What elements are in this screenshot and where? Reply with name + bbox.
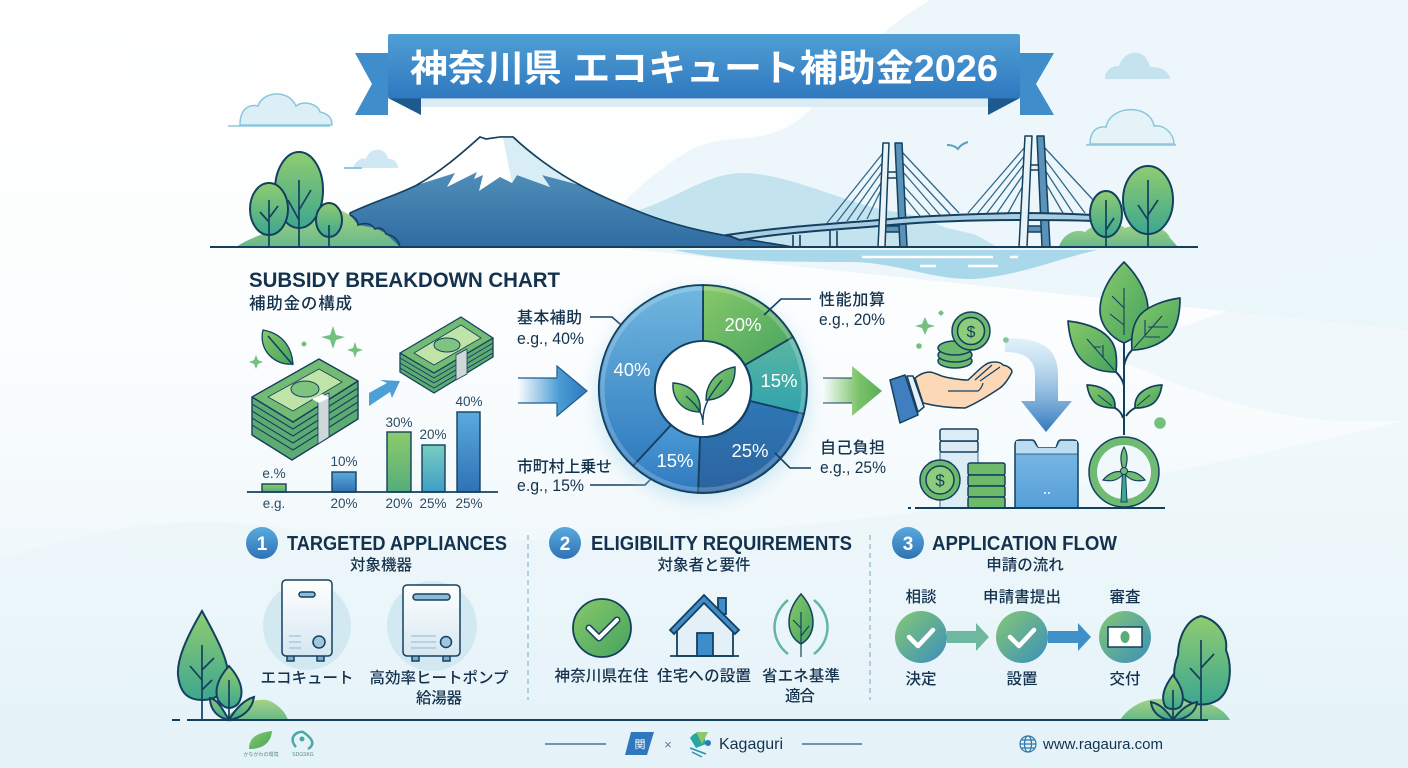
label: 市町村上乗せ: e.g., 15% bbox=[517, 477, 584, 495]
icon: leaf energy bbox=[774, 594, 828, 657]
label: 基本補助: 基本補助 bbox=[517, 309, 582, 327]
step: check 2 bbox=[996, 611, 1048, 663]
label: 自己負担: e.g., 25% bbox=[820, 459, 886, 477]
heading 1: TARGETED APPLIANCES bbox=[287, 533, 507, 555]
step: check 1 bbox=[895, 611, 947, 663]
badge 3: 3 bbox=[903, 534, 913, 555]
coin bbox=[920, 460, 960, 500]
section 3: application flow bbox=[892, 527, 1151, 688]
appliance labels: 高効率ヒートポンプ bbox=[370, 669, 509, 687]
flow arrows bbox=[947, 623, 1091, 651]
green stack bbox=[968, 463, 1005, 508]
badge 3 bbox=[892, 527, 924, 559]
base line under plant bbox=[908, 507, 1165, 509]
label: 基本補助 bbox=[517, 309, 634, 348]
flow bottom labels: 交付 bbox=[1109, 670, 1141, 688]
mountain bbox=[350, 137, 793, 247]
bottom left trees bbox=[178, 611, 288, 720]
logo: leaf: かながわの環境 bbox=[243, 751, 279, 758]
bar value labels bbox=[262, 394, 483, 511]
icon: hand with coins bbox=[890, 312, 1012, 423]
bar value labels: 20% bbox=[419, 427, 447, 442]
icon: large money stack bbox=[252, 359, 358, 460]
badge 2: 2 bbox=[560, 534, 570, 555]
bar value labels: e.% bbox=[262, 466, 286, 481]
label: 性能加算: e.g., 20% bbox=[819, 311, 885, 329]
section 1: targeted appliances bbox=[246, 527, 509, 707]
icon: base with cylinders, box, turbine bbox=[920, 429, 1159, 508]
top right trees bbox=[1059, 166, 1178, 247]
horizon line bbox=[210, 246, 1198, 248]
heading 3: APPLICATION FLOW bbox=[932, 533, 1117, 555]
suspension bridge bbox=[727, 136, 1095, 247]
bird bbox=[947, 142, 968, 149]
icon: eco cute unit bbox=[263, 580, 351, 670]
logo: Kagaguri bbox=[690, 732, 783, 757]
tower right legs bbox=[895, 136, 1050, 247]
background hills and water bbox=[620, 173, 1098, 279]
flow top labels: 申請書提出 bbox=[983, 588, 1061, 606]
footer line bbox=[172, 719, 1208, 721]
logo: Kagaguri: Kagaguri bbox=[719, 736, 783, 753]
badge 2 bbox=[549, 527, 581, 559]
eligibility labels bbox=[554, 667, 840, 705]
step: money bbox=[1099, 611, 1151, 663]
battery box bbox=[1015, 440, 1078, 508]
label: 基本補助: e.g., 40% bbox=[517, 330, 584, 348]
appliance labels bbox=[260, 669, 509, 707]
bars bbox=[262, 412, 480, 492]
icon: large plant bbox=[1068, 262, 1180, 435]
label: 自己負担: 自己負担 bbox=[820, 439, 885, 457]
flow bottom labels: 決定 bbox=[905, 670, 937, 688]
bridge cables bbox=[827, 147, 1095, 223]
bar value labels: e.g. bbox=[263, 496, 285, 511]
piers bbox=[793, 231, 837, 247]
donut percentages: 25% bbox=[731, 440, 769, 461]
icon: center sprout bbox=[673, 367, 735, 425]
eligibility labels: 省エネ基準 bbox=[762, 667, 840, 685]
section 2: eligibility bbox=[549, 527, 852, 705]
icon: small money stack bbox=[400, 317, 493, 393]
bar value labels: 20% bbox=[385, 496, 413, 511]
label: 自己負担 bbox=[775, 439, 886, 477]
icon: check bbox=[573, 599, 631, 657]
tower left legs bbox=[878, 136, 1032, 247]
top left trees bbox=[236, 152, 400, 247]
badge 1: 1 bbox=[257, 534, 268, 555]
bar chart bbox=[247, 394, 498, 511]
flow bottom labels bbox=[905, 670, 1141, 688]
eligibility labels: 住宅への設置 bbox=[657, 667, 751, 685]
footer website: www.ragaura.com bbox=[1042, 736, 1163, 753]
flow top labels: 審査 bbox=[1109, 588, 1141, 606]
arrow: blue to donut bbox=[518, 366, 587, 416]
donut chart bbox=[597, 285, 809, 501]
heading 1 bbox=[287, 533, 507, 574]
slice: 基本補助 40% bbox=[599, 285, 703, 466]
footer center logos bbox=[545, 732, 862, 757]
flow top labels bbox=[905, 588, 1141, 606]
flow bottom labels: 設置 bbox=[1006, 670, 1038, 688]
heading 2: ELIGIBILITY REQUIREMENTS bbox=[591, 533, 852, 555]
label: 性能加算 bbox=[764, 290, 885, 329]
title text: 神奈川県 エコキュート補助金2026 bbox=[410, 48, 998, 89]
slice: 15% teal bbox=[745, 337, 807, 414]
eligibility labels: 神奈川県在住 bbox=[554, 667, 648, 685]
heading 3 bbox=[932, 533, 1117, 574]
arrow: green to hand bbox=[823, 366, 882, 416]
chart heading: SUBSIDY BREAKDOWN CHART bbox=[249, 269, 560, 292]
bar value labels: 25% bbox=[455, 496, 483, 511]
flow top labels: 相談 bbox=[905, 588, 937, 606]
slice: 自己負担 25% bbox=[698, 401, 804, 493]
icon: heat pump unit bbox=[387, 581, 477, 671]
appliance labels: エコキュート bbox=[260, 670, 354, 687]
cylinder stack bbox=[940, 429, 978, 508]
appliance labels: 給湯器 bbox=[416, 689, 462, 707]
icon: leaf and sparkles bbox=[249, 326, 363, 369]
badge 1 bbox=[246, 527, 278, 559]
donut percentages: 15% bbox=[760, 370, 798, 391]
title banner bbox=[355, 34, 1054, 115]
bar value labels: 10% bbox=[330, 454, 358, 469]
icon: house bbox=[670, 595, 739, 656]
bar value labels: 40% bbox=[455, 394, 483, 409]
footer center logos: × bbox=[664, 737, 672, 752]
arrow: curved blue down bbox=[1005, 338, 1072, 432]
heading 1: 対象機器 bbox=[350, 555, 412, 574]
logo: blue flag bbox=[625, 732, 654, 755]
logo: blue flag: 関 bbox=[634, 738, 646, 751]
eligibility labels: 適合 bbox=[785, 687, 815, 705]
heading 2 bbox=[591, 533, 852, 574]
coin stack bbox=[938, 341, 972, 368]
tower beams bbox=[884, 165, 1043, 232]
logo: teal figure: SDGSKG bbox=[292, 752, 314, 758]
donut percentages: 40% bbox=[613, 359, 651, 380]
coin: $ bbox=[935, 471, 945, 490]
label: 性能加算: 性能加算 bbox=[819, 290, 885, 309]
bar value labels: 20% bbox=[330, 496, 358, 511]
clouds bbox=[228, 53, 1176, 168]
label: 市町村上乗せ: 市町村上乗せ bbox=[517, 458, 612, 476]
slice: 性能加算 20% bbox=[703, 285, 793, 365]
bar value labels: 30% bbox=[385, 415, 413, 430]
icon: arrow between stacks bbox=[369, 380, 400, 406]
chart heading: 補助金の構成 bbox=[249, 294, 352, 313]
dashed dividers bbox=[528, 535, 870, 700]
turbine circle bbox=[1089, 437, 1159, 507]
bar value labels: 25% bbox=[419, 496, 447, 511]
bridge deck bbox=[727, 213, 1093, 240]
sparkles near hand bbox=[915, 310, 1166, 429]
icon: hand with coins: $ bbox=[967, 324, 976, 341]
chart heading bbox=[249, 269, 560, 313]
heading 3: 申請の流れ bbox=[986, 556, 1064, 574]
label: 市町村上乗せ bbox=[517, 458, 658, 495]
slice: 市町村上乗せ 15% bbox=[633, 425, 700, 493]
heading 2: 対象者と要件 bbox=[657, 555, 751, 574]
donut percentages bbox=[613, 314, 798, 471]
bottom right trees bbox=[1120, 616, 1230, 720]
donut percentages: 15% bbox=[656, 450, 694, 471]
donut percentages: 20% bbox=[724, 314, 762, 335]
footer left logos bbox=[243, 731, 314, 758]
